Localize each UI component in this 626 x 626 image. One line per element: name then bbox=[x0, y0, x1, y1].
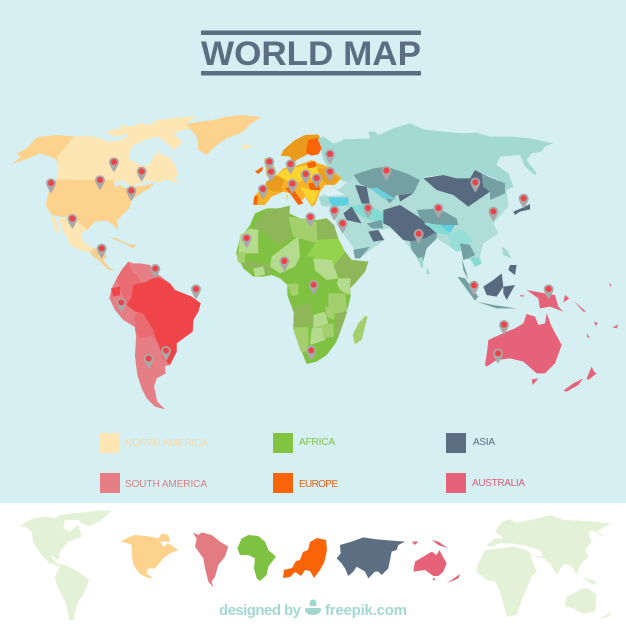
legend item: Africa bbox=[273, 433, 335, 453]
legend item: Australia bbox=[446, 473, 525, 493]
location pins: Americas and Africa bbox=[46, 157, 319, 369]
legend item: North America: NORTH AMERICA bbox=[125, 438, 208, 449]
legend item: North America bbox=[100, 433, 208, 453]
legend item: Europe: EUROPE bbox=[299, 479, 338, 490]
footer credit bbox=[219, 600, 407, 619]
map: North America bbox=[13, 115, 262, 271]
icon: freepik logo bbox=[304, 600, 322, 615]
silhouette: Americas bbox=[19, 511, 112, 621]
legend item: Australia: AUSTRALIA bbox=[472, 478, 525, 489]
legend item: Asia: ASIA bbox=[473, 437, 495, 448]
silhouette: Europe bbox=[283, 538, 327, 578]
legend bbox=[100, 433, 525, 493]
legend item: Asia bbox=[446, 433, 495, 453]
silhouette: Africa bbox=[237, 535, 276, 581]
legend item: Europe bbox=[273, 473, 338, 493]
map: Australia and Oceania bbox=[485, 283, 618, 392]
legend item: South America: SOUTH AMERICA bbox=[125, 479, 207, 490]
silhouette: Australia bbox=[412, 540, 460, 583]
location pins: Eurasia and Australia bbox=[258, 149, 554, 364]
map: Asia bbox=[318, 123, 553, 308]
map: Africa bbox=[236, 206, 368, 364]
map: South America bbox=[109, 262, 201, 409]
title: WORLD MAP bbox=[201, 35, 421, 73]
footer credit: designed by bbox=[219, 602, 302, 619]
bottom white panel bbox=[0, 503, 626, 626]
silhouette: Old World bbox=[477, 515, 612, 619]
legend item: Africa: AFRICA bbox=[299, 437, 335, 448]
silhouette: South America bbox=[193, 532, 228, 587]
map: Europe bbox=[253, 134, 342, 207]
silhouette: North America bbox=[121, 533, 178, 578]
legend item: South America bbox=[100, 473, 207, 493]
silhouette: Asia bbox=[337, 537, 405, 578]
footer credit: freepik.com bbox=[325, 602, 407, 619]
